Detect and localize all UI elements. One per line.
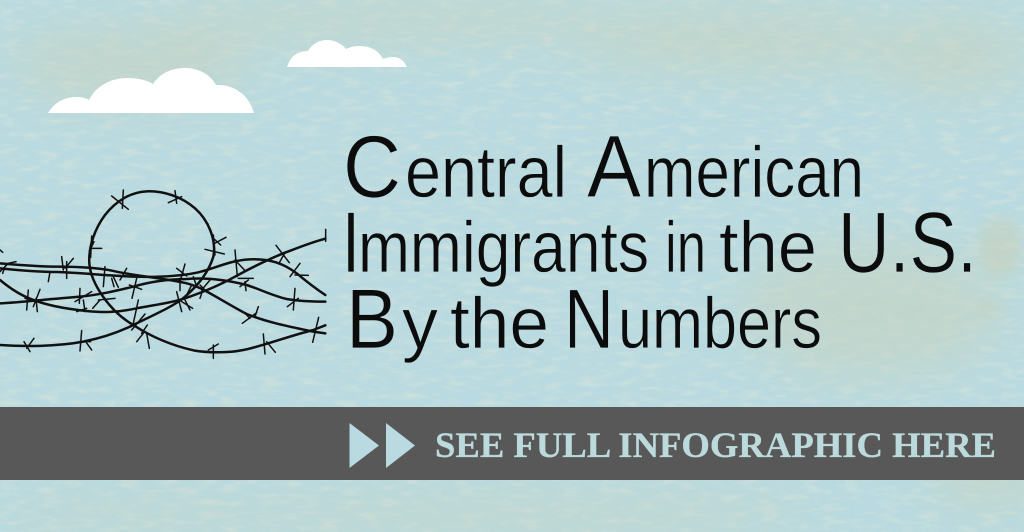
title line 3: the	[450, 284, 549, 364]
wire strands	[0, 191, 325, 352]
title line 2: U.S.	[838, 195, 977, 291]
call to action text: SEE FULL INFOGRAPHIC HERE	[435, 425, 996, 465]
title line 3: N	[564, 272, 614, 366]
icon: double play arrows	[350, 423, 415, 468]
title line 1	[343, 117, 864, 216]
title line 3: B	[346, 272, 398, 366]
title line 2: the	[719, 208, 817, 288]
wire end tick	[323, 229, 328, 241]
title	[342, 117, 977, 366]
banner	[0, 407, 1024, 480]
cloud: large left	[48, 68, 254, 113]
title line 1: merican	[644, 133, 864, 213]
title line 2: I	[342, 195, 360, 291]
title line 3: y	[402, 284, 438, 364]
barbed wire	[0, 190, 326, 358]
title line 2: mmigrants	[358, 208, 649, 288]
title line 3	[346, 272, 822, 366]
title line 3: umbers	[618, 284, 822, 364]
title line 1: A	[587, 117, 641, 216]
title line 1: C	[343, 117, 401, 216]
title line 2	[342, 195, 977, 291]
title line 1: entral	[405, 133, 567, 213]
cloud: small right	[287, 40, 407, 67]
title line 2: in	[665, 208, 706, 288]
barbs	[0, 190, 325, 358]
